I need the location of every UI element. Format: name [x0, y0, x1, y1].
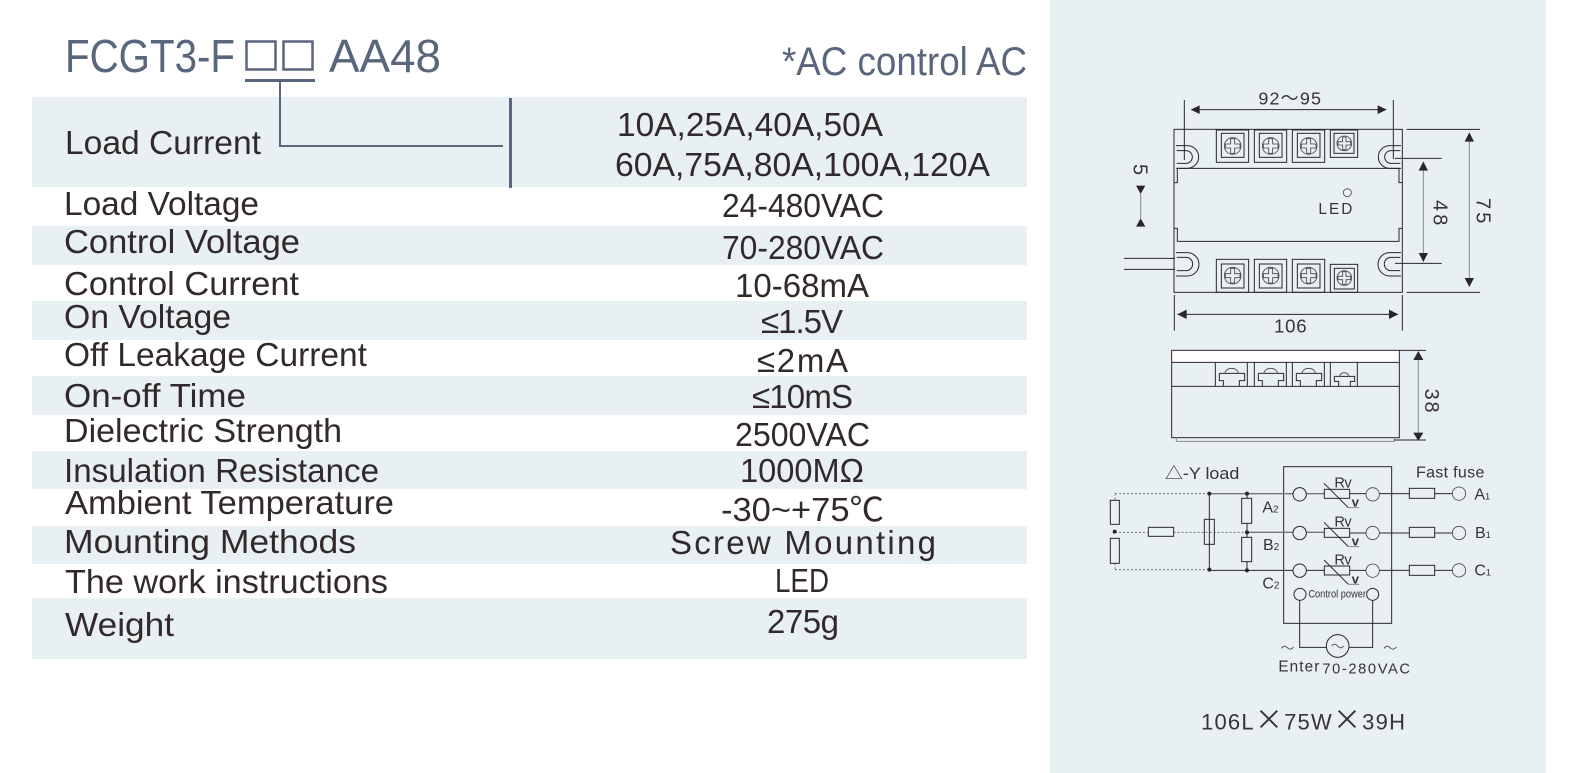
- height label: 38: [1420, 389, 1442, 413]
- table row values: Screw Mounting: [670, 524, 936, 561]
- title: model number: FCGT3-F: [65, 30, 235, 82]
- dimension labels: 48: [1428, 200, 1450, 225]
- circuit labels: A1: [1474, 486, 1490, 503]
- panel: dimension drawings background: [1050, 0, 1546, 773]
- circuit labels: △-Y load: [1165, 464, 1239, 483]
- control power circuit: [1278, 588, 1410, 677]
- table row labels: Control Current: [64, 266, 300, 303]
- control power circuit: 70-280VAC: [1322, 661, 1410, 677]
- dimension labels: 5: [1129, 164, 1151, 175]
- table row labels: Off Leakage Current: [64, 337, 368, 374]
- load network: [1110, 492, 1293, 572]
- dimension lines: [1124, 100, 1480, 331]
- table row labels: Mounting Methods: [64, 524, 356, 561]
- table row values: ≤1.5V: [761, 303, 843, 340]
- dimension labels: 106: [1274, 315, 1307, 336]
- subtitle: AC control AC: *AC control AC: [782, 40, 1027, 84]
- table row values: ≤2mA: [757, 342, 848, 379]
- top terminals: [1216, 130, 1358, 162]
- table row values: 70-280VAC: [722, 229, 884, 266]
- panel: table striped rows: [32, 97, 1027, 659]
- table row labels: Load Voltage: [64, 186, 259, 223]
- circuit labels: Rv: [1334, 515, 1352, 531]
- phase circuits: [1293, 483, 1466, 584]
- mounting slots: [1176, 146, 1401, 276]
- table row values: 24-480VAC: [722, 187, 884, 224]
- table row labels: Load Current: [65, 125, 262, 162]
- diagram: top view with dimensions: [1124, 88, 1494, 336]
- table row labels: On-off Time: [64, 378, 246, 415]
- control power circuit: Control power: [1308, 589, 1366, 601]
- table row labels: Insulation Resistance: [64, 453, 379, 490]
- circuit labels: C1: [1474, 563, 1491, 580]
- table row values: 60A,75A,80A,100A,120A: [615, 146, 990, 183]
- table row values: -30~+75℃: [721, 491, 884, 528]
- dimension labels: [1129, 88, 1494, 336]
- circuit labels: v: [1352, 534, 1360, 549]
- circuit labels: Rv: [1334, 552, 1352, 568]
- title: model number: AA48: [329, 30, 441, 82]
- table row labels: The work instructions: [65, 564, 388, 601]
- overall dimensions caption: 106L×75W×39H: [1201, 698, 1405, 738]
- circuit labels: v: [1352, 495, 1360, 510]
- table row labels: On Voltage: [64, 299, 231, 336]
- title: model number: [65, 30, 441, 82]
- circuit labels: Rv: [1334, 475, 1352, 491]
- table row labels: Control Voltage: [64, 224, 300, 261]
- table row values: 10A,25A,40A,50A: [617, 106, 883, 143]
- circuit labels: A2: [1262, 499, 1279, 516]
- circuit labels: B2: [1263, 537, 1280, 554]
- LED indicator: [1318, 189, 1352, 218]
- circuit labels: v: [1352, 571, 1360, 586]
- table row values: 275g: [767, 603, 839, 640]
- diagram: side view with height dimension: [1172, 350, 1442, 441]
- bottom terminals: [1216, 259, 1358, 292]
- table row values: 2500VAC: [735, 416, 870, 453]
- table row labels: [64, 125, 394, 644]
- table row values: ≤10mS: [752, 378, 853, 415]
- table row values: LED: [775, 562, 829, 599]
- connector from model code to load current: [245, 80, 510, 188]
- circuit labels: B1: [1475, 525, 1491, 542]
- dimension labels: 75: [1472, 198, 1494, 223]
- diagram: wiring schematic: [1110, 464, 1491, 738]
- table row values: 1000MΩ: [740, 452, 864, 489]
- table row values: 10-68mA: [735, 267, 869, 304]
- table row labels: Dielectric Strength: [64, 413, 342, 450]
- circuit labels: [1165, 464, 1491, 592]
- control power circuit: Enter: [1278, 659, 1319, 676]
- table row labels: Weight: [65, 607, 175, 644]
- LED indicator: LED: [1318, 201, 1352, 218]
- table row values: [615, 106, 990, 640]
- circuit labels: Fast fuse: [1416, 465, 1484, 482]
- circuit labels: C2: [1262, 575, 1280, 592]
- dimension labels: 92～95: [1258, 88, 1321, 108]
- table row labels: Ambient Temperature: [65, 485, 394, 522]
